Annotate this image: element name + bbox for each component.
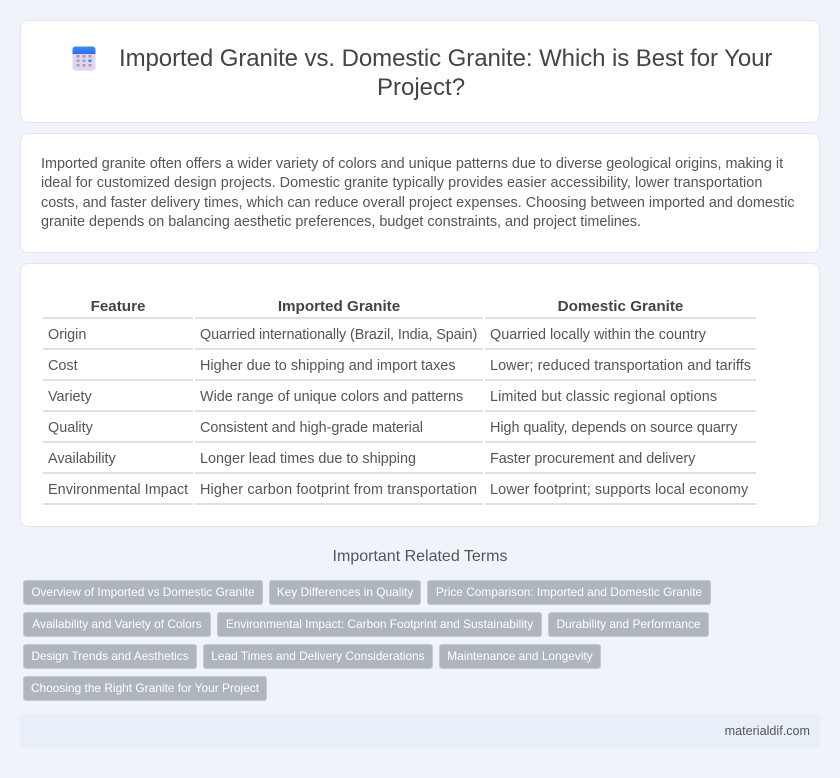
comparison table: Lower footprint; supports local economy [490, 482, 748, 498]
related term tags [23, 580, 711, 701]
comparison table: Quarried locally within the country [490, 327, 706, 343]
title: Imported Granite vs. Domestic Granite: Which is Best for Your [119, 45, 772, 72]
text block: summary paragraph: costs, and faster delivery times, which can reduce overall project expenses. Choosing between imported and domestic [41, 195, 794, 211]
related term tags: Choosing the Right Granite for Your Project [31, 681, 259, 695]
comparison table: Cost [48, 358, 78, 374]
related term tags: Design Trends and Aesthetics [31, 649, 189, 663]
comparison table: Higher carbon footprint from transportation [200, 482, 477, 498]
comparison table: Domestic Granite [558, 298, 683, 315]
text block: summary paragraph: ideal for customized design projects. Domestic granite typically provides easier accessibility, lower transportation [41, 175, 762, 191]
comparison table: Wide range of unique colors and patterns [200, 389, 463, 405]
comparison table [43, 298, 756, 505]
comparison table: Higher due to shipping and import taxes [200, 358, 456, 374]
related term tags: Durability and Performance [556, 617, 701, 631]
related term tags: Maintenance and Longevity [447, 649, 593, 663]
related term tags: Availability and Variety of Colors [32, 617, 202, 631]
related term tags: Environmental Impact: Carbon Footprint and Sustainability [226, 617, 533, 631]
text block: summary paragraph: Imported granite often offers a wider variety of colors and unique patterns due to diverse geological origins, making it [41, 156, 783, 172]
footer [20, 714, 820, 748]
comparison table: Longer lead times due to shipping [200, 451, 416, 467]
related term tags: Price Comparison: Imported and Domestic Granite [436, 585, 702, 599]
related term tags: Lead Times and Delivery Considerations [211, 649, 425, 663]
panel: summary [20, 133, 820, 253]
comparison table: Origin [48, 327, 86, 343]
comparison table: Consistent and high-grade material [200, 420, 423, 436]
comparison table: Limited but classic regional options [490, 389, 717, 405]
comparison table: Quarried internationally (Brazil, India, Spain) [200, 327, 477, 343]
related term tags: Overview of Imported vs Domestic Granite [31, 585, 255, 599]
related term tags: Key Differences in Quality [277, 585, 413, 599]
panel: header [20, 20, 820, 123]
comparison table: Imported Granite [278, 298, 400, 315]
comparison table: Feature [91, 298, 145, 315]
panel: comparison table [20, 263, 820, 527]
comparison table: Variety [48, 389, 92, 405]
footer source text: materialdif.com [725, 724, 810, 738]
heading: related terms: Important Related Terms [333, 548, 507, 565]
comparison table: Availability [48, 451, 116, 467]
comparison table: Quality [48, 420, 93, 436]
comparison table: High quality, depends on source quarry [490, 420, 737, 436]
comparison table: Faster procurement and delivery [490, 451, 695, 467]
icon: calendar [72, 46, 96, 70]
comparison table: Lower; reduced transportation and tariffs [490, 358, 751, 374]
title: Project? [377, 74, 465, 101]
text block: summary paragraph [41, 156, 794, 230]
title [119, 45, 772, 101]
comparison table: Environmental Impact [48, 482, 188, 498]
text block: summary paragraph: granite depends on balancing aesthetic preferences, budget constraints, and project timelines. [41, 214, 641, 230]
